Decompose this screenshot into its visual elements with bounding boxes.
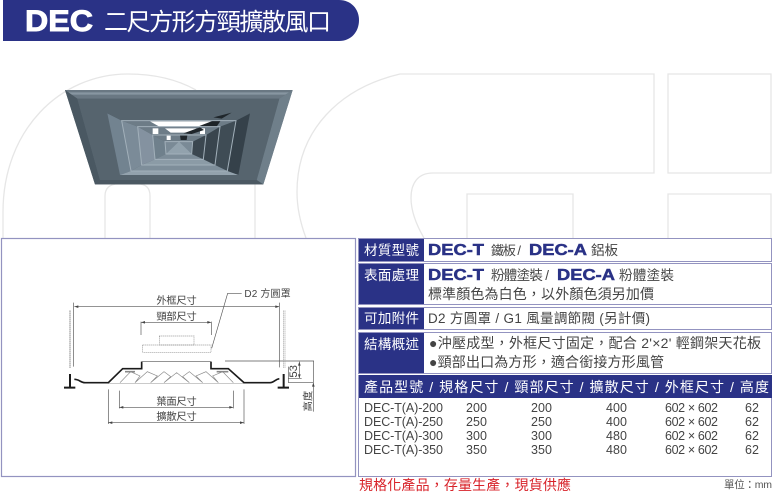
unit note: 單位：mm [724,478,772,491]
row: surface finish: 粉體塗裝 / [491,267,549,283]
row: structure overview: 結構概述 [364,337,420,352]
specification table: DEC-T(A)-350 [364,443,443,457]
technical drawing with dimensions: 頸部尺寸 [156,310,197,323]
specification table: 602 × 602 [665,415,718,429]
specification table: DEC-T(A)-200 [364,401,443,415]
specification table: 400 [606,415,627,429]
row: surface finish: DEC-A [557,267,616,284]
row: structure overview: ●沖壓成型，外框尺寸固定，配合 2'×2' 輕鋼架天花板 [429,335,761,351]
row: material [358,238,772,262]
specification table: 480 [606,443,627,457]
row: surface finish: 標準顏色為白色，以外顏色須另加價 [428,286,654,302]
technical drawing with dimensions: 擴散尺寸 [156,410,197,423]
technical drawing with dimensions: 53 [288,365,300,378]
specification table: DEC-T(A)-250 [364,415,443,429]
row: surface finish [358,264,772,304]
row: accessories: 可加附件 [364,311,419,326]
title banner [3,0,359,41]
row: material: DEC-A [529,242,588,259]
row: surface finish: 粉體塗裝 [619,267,674,283]
table header: 產品型號 / 規格尺寸 / 頸部尺寸 / 擴散尺寸 / 外框尺寸 / 高度 [364,379,769,395]
specification table: 400 [606,401,627,415]
specification table: DEC-T(A)-300 [364,429,443,443]
row: surface finish: DEC-T [428,267,484,284]
row: accessories: D2 方圓罩 / G1 風量調節閥 (另計價) [428,311,650,326]
specification table: 62 [745,415,759,429]
specification table: 602 × 602 [665,429,718,443]
specification table: 62 [745,401,759,415]
row: material: 鋁板 [591,243,618,258]
technical drawing with dimensions: D2 方圓罩 [244,287,291,300]
specification table: 480 [606,429,627,443]
specification table: 602 × 602 [665,443,718,457]
row: structure overview [358,332,772,374]
specification table: 350 [531,443,552,457]
specification table: 250 [466,415,487,429]
row: material: 鐵板 / [491,243,521,258]
specification table [358,375,772,476]
specification table: 200 [466,401,487,415]
row: accessories [358,308,772,330]
specification table: 300 [531,429,552,443]
specification table: 602 × 602 [665,401,718,415]
row: structure overview: ●頸部出口為方形，適合銜接方形風管 [429,354,664,370]
technical drawing with dimensions: 高度 [301,391,314,411]
specification table: 300 [466,429,487,443]
technical drawing with dimensions [64,287,315,424]
technical drawing with dimensions: 外框尺寸 [156,294,197,307]
row: material: 材質型號 [364,243,420,258]
specification table: 250 [531,415,552,429]
specification table: 62 [745,429,759,443]
technical drawing with dimensions: 葉面尺寸 [156,395,197,408]
row: material: DEC-T [428,242,484,259]
footer note: stock availability: 規格化產品，存量生產，現貨供應 [359,477,571,493]
row: surface finish: 表面處理 [364,268,420,283]
specification table: 62 [745,443,759,457]
specification table: 200 [531,401,552,415]
specification table: 350 [466,443,487,457]
panel: section drawing [2,238,356,476]
title banner: DEC [25,5,93,38]
title banner: 二尺方形方頸擴散風口 [104,9,331,36]
product illustration: square ceiling diffuser [65,90,293,184]
